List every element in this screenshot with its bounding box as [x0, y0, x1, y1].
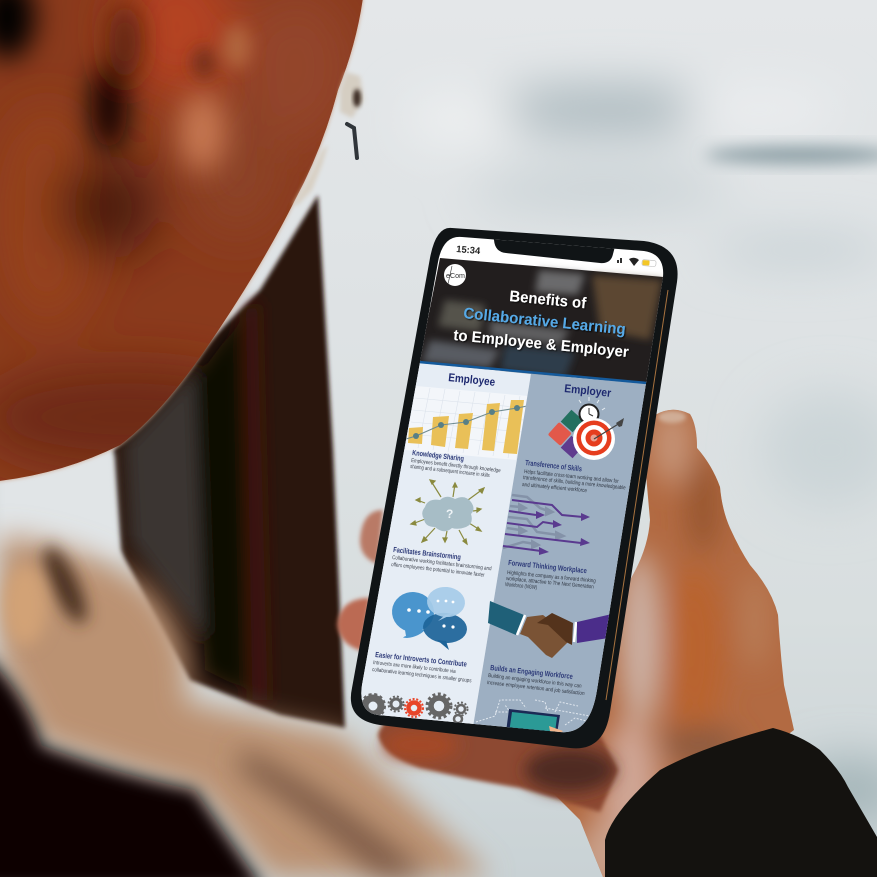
head of person in foreground — [0, 0, 387, 487]
blue divider — [419, 362, 647, 383]
text: facilitates brainstorming: Collaborative working facilitates brainstorming and — [392, 555, 492, 572]
icon: speech bubbles — [390, 585, 468, 650]
logo: eCom — [446, 271, 465, 280]
employer column — [474, 374, 646, 732]
black sleeve — [605, 728, 877, 877]
employee column — [361, 363, 531, 724]
text: builds an engaging workforce: Builds an Engaging Workforce — [490, 663, 573, 681]
text: builds an engaging workforce — [487, 664, 584, 695]
text: easier for introverts: Easier for Introverts to Contribute — [375, 650, 467, 669]
heading: Employee: Employee — [448, 372, 496, 389]
status bar: 15:34 — [456, 244, 481, 257]
text: forward thinking workplace: Highlights the company as a forward thinking — [507, 570, 596, 585]
icon: brainstorm cloud with arrows — [411, 480, 484, 544]
title: Collaborative Learning — [463, 305, 626, 338]
background: bright window at lower left — [0, 452, 120, 560]
title: Benefits of — [509, 288, 588, 312]
phone body — [351, 228, 678, 748]
thumb under phone — [378, 718, 618, 812]
left fingers behind the phone — [337, 510, 383, 651]
text: transference of skills: Transference of Skills — [525, 458, 582, 473]
text: knowledge sharing: Employees benefit directly through knowledge — [411, 458, 501, 474]
text: knowledge sharing — [410, 450, 500, 477]
hair and clothing in foreground — [0, 535, 490, 877]
hand holding phone — [556, 410, 794, 877]
text: transference of skills: and ultimately efficient workforce — [522, 482, 587, 494]
title — [453, 288, 629, 361]
notch — [494, 240, 614, 264]
text: easier for introverts: Introverts are more likely to contribute via — [373, 660, 457, 675]
text: forward thinking workplace — [505, 558, 596, 591]
icon: brainstorm cloud with arrows: ? — [446, 507, 453, 521]
text: transference of skills: transference of skills, building a more knowledgeable — [523, 475, 626, 491]
text: forward thinking workplace: Workforce (NGW) — [505, 582, 537, 591]
text: knowledge sharing: Knowledge Sharing — [412, 448, 465, 463]
icon: forward arrows — [503, 495, 590, 555]
text: forward thinking workplace: Forward Thinking Workplace — [508, 558, 587, 575]
header banner — [419, 258, 664, 384]
icon: gears — [362, 694, 468, 723]
title: to Employee & Employer — [453, 327, 629, 361]
text: forward thinking workplace: workplace, attractive to The Next Generation — [505, 576, 594, 590]
text: transference of skills — [522, 458, 626, 494]
phone screen — [361, 236, 664, 732]
text: easier for introverts: collaborative learning techniques in smaller groups — [372, 667, 472, 684]
logo — [444, 264, 466, 286]
text: builds an engaging workforce: increase employee retention and job satisfaction — [487, 680, 585, 697]
text: facilitates brainstorming: offers employees the potential to innovate faster — [391, 562, 485, 579]
icon: puzzle, clock and target — [548, 397, 624, 460]
icon: handshake — [488, 601, 612, 658]
text: facilitates brainstorming — [391, 545, 492, 579]
glasses temple and hinge — [293, 72, 364, 205]
text: facilitates brainstorming: Facilitates Brainstorming — [393, 545, 462, 562]
text: knowledge sharing: sharing and a subsequent increase in skills — [410, 464, 490, 479]
text: builds an engaging workforce: Building an engaging workforce in this way can — [488, 673, 582, 690]
icon: tablet with circuit lines — [476, 700, 588, 732]
text: easier for introverts — [372, 650, 472, 684]
text: transference of skills: Helps facilitate cross-team working and allow for — [524, 469, 619, 485]
background: dark window frame — [113, 195, 345, 728]
bar chart — [405, 386, 528, 460]
status bar — [456, 244, 656, 267]
heading: Employer: Employer — [564, 383, 612, 400]
